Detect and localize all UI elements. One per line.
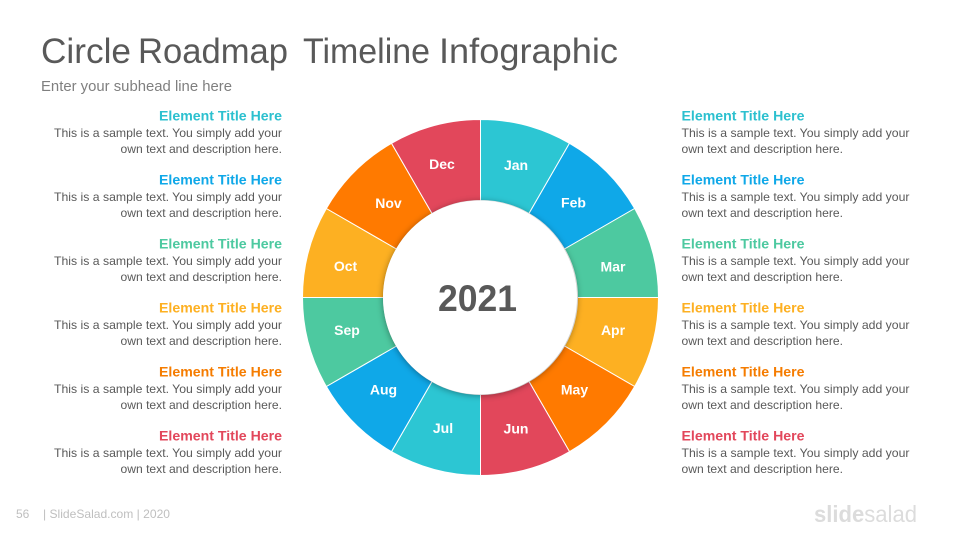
left item 3: [54, 236, 282, 284]
right item 6: This is a sample text. You simply add your: [682, 446, 910, 460]
segment: Oct: [302, 208, 396, 298]
left item 2: Element Title Here: [159, 172, 282, 188]
left item 1: own text and description here.: [120, 142, 282, 156]
right item 2: own text and description here.: [682, 206, 843, 220]
left item 2: This is a sample text. You simply add your: [54, 190, 282, 204]
right item 2: [682, 172, 910, 220]
segment: May: [529, 346, 635, 452]
right item 1: [682, 108, 910, 156]
left item 1: [54, 108, 282, 156]
month labels: May: [561, 382, 588, 398]
month labels: Feb: [561, 194, 586, 210]
month labels: Oct: [334, 258, 358, 274]
month labels: Jul: [433, 420, 453, 436]
left item 3: Element Title Here: [159, 236, 282, 252]
left item 6: This is a sample text. You simply add your: [54, 446, 282, 460]
subhead: Enter your subhead line here: [41, 79, 232, 95]
right item 5: [682, 364, 910, 412]
left item 3: This is a sample text. You simply add your: [54, 254, 282, 268]
right item 1: Element Title Here: [682, 108, 805, 124]
right column of text blocks: [682, 108, 910, 476]
right item 2: This is a sample text. You simply add your: [682, 190, 910, 204]
title: Infographic: [439, 32, 618, 71]
right item 1: own text and description here.: [682, 142, 843, 156]
right item 5: own text and description here.: [682, 398, 843, 412]
center hub shadow: [383, 202, 577, 396]
right item 2: Element Title Here: [682, 172, 805, 188]
segment: Jul: [392, 382, 480, 476]
title: Roadmap: [138, 32, 288, 71]
right item 6: Element Title Here: [682, 428, 805, 444]
circular month ring: [302, 119, 658, 476]
left item 6: [54, 428, 282, 476]
month labels: Aug: [370, 382, 397, 398]
segment: Apr: [564, 298, 658, 386]
segment: Sep: [302, 298, 396, 386]
right item 5: This is a sample text. You simply add your: [682, 382, 910, 396]
segment: Nov: [326, 143, 432, 249]
right item 6: [682, 428, 910, 476]
left item 5: own text and description here.: [120, 398, 282, 412]
left item 6: own text and description here.: [120, 462, 282, 476]
segment: Mar: [564, 208, 658, 298]
left item 5: Element Title Here: [159, 364, 282, 380]
left item 4: Element Title Here: [159, 300, 282, 316]
segment: Dec: [392, 119, 480, 214]
month labels: Sep: [334, 322, 360, 338]
right item 4: [682, 300, 910, 348]
right item 4: own text and description here.: [682, 334, 843, 348]
month labels: Dec: [429, 156, 455, 172]
month labels: Nov: [375, 195, 402, 211]
footer page info: 56: [16, 507, 30, 521]
left item 5: [54, 364, 282, 412]
left item 5: This is a sample text. You simply add your: [54, 382, 282, 396]
right item 3: own text and description here.: [682, 270, 843, 284]
segment: Aug: [326, 346, 432, 452]
title: Circle: [41, 32, 131, 71]
month labels: [334, 156, 626, 436]
right item 3: Element Title Here: [682, 236, 805, 252]
left item 6: Element Title Here: [159, 428, 282, 444]
right item 5: Element Title Here: [682, 364, 805, 380]
right item 1: This is a sample text. You simply add your: [682, 126, 910, 140]
footer source: | SlideSalad.com | 2020: [43, 507, 170, 521]
month labels: Apr: [601, 322, 626, 338]
segment: Jun: [480, 382, 570, 476]
month labels: Mar: [601, 258, 626, 274]
center year: 2021: [438, 278, 517, 319]
left item 4: [54, 300, 282, 348]
left item 3: own text and description here.: [120, 270, 282, 284]
segment: Feb: [529, 143, 635, 249]
right item 4: This is a sample text. You simply add your: [682, 318, 910, 332]
right item 6: own text and description here.: [682, 462, 843, 476]
left column of text blocks: [54, 108, 282, 476]
left item 1: Element Title Here: [159, 108, 282, 124]
right item 3: This is a sample text. You simply add your: [682, 254, 910, 268]
center hub: [383, 200, 577, 394]
left item 4: This is a sample text. You simply add your: [54, 318, 282, 332]
footer logo: slidesalad: [814, 501, 917, 527]
left item 4: own text and description here.: [120, 334, 282, 348]
left item 2: [54, 172, 282, 220]
right item 3: [682, 236, 910, 284]
right item 4: Element Title Here: [682, 300, 805, 316]
month labels: Jan: [504, 157, 528, 173]
month labels: Jun: [504, 420, 528, 436]
left item 2: own text and description here.: [120, 206, 282, 220]
segment: Jan: [480, 119, 570, 214]
left item 1: This is a sample text. You simply add your: [54, 126, 282, 140]
title: Timeline: [303, 32, 430, 71]
